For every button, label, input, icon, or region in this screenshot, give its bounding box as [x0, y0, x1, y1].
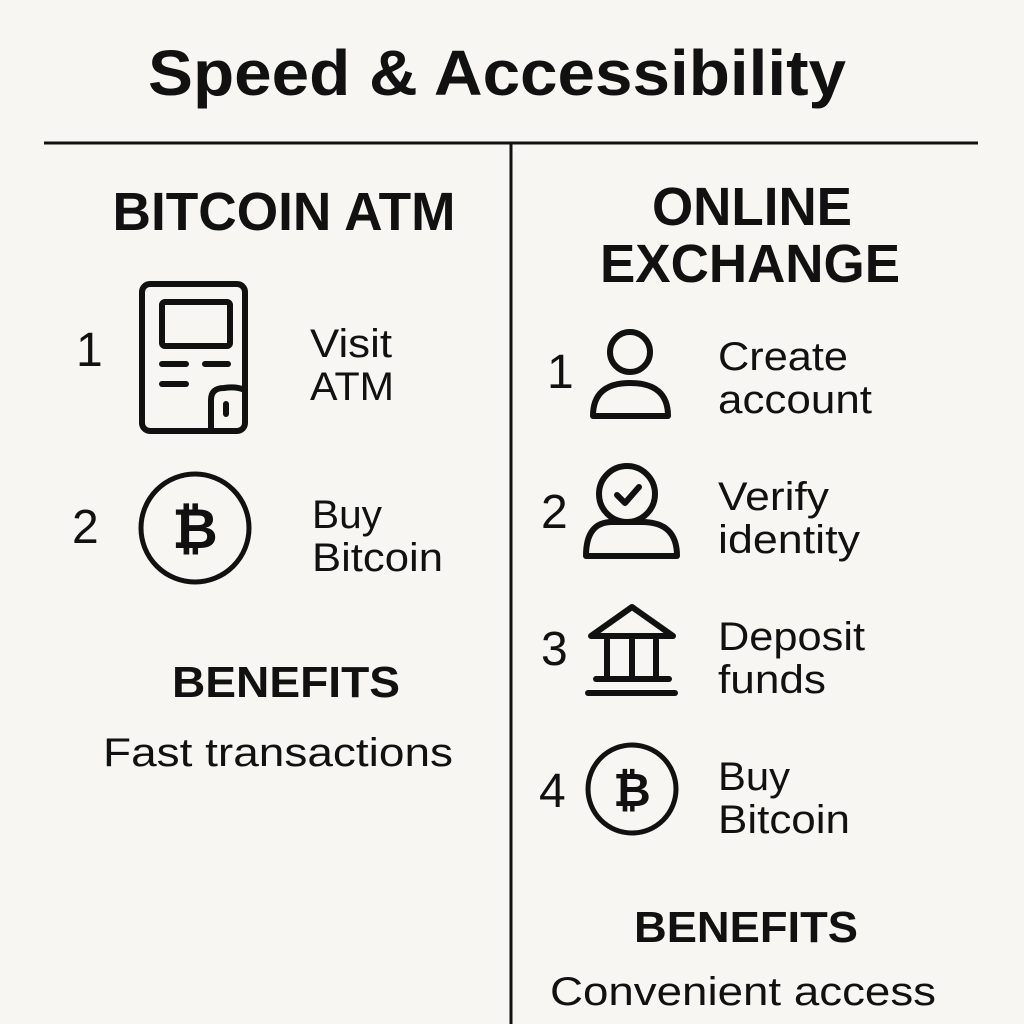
step 1: visit atm: ATM [310, 365, 394, 409]
panel: online exchange: EXCHANGE [600, 234, 900, 294]
icon: bank [588, 607, 675, 693]
icon: atm [142, 284, 245, 431]
panel: bitcoin atm [72, 182, 456, 775]
step 1: create account: 1 [547, 346, 574, 399]
step 2: verify identity [541, 466, 860, 562]
step 1: create account [547, 332, 872, 422]
step 1: create account: account [718, 378, 872, 422]
step 2: buy bitcoin: 2 [72, 501, 99, 554]
step 1: visit atm: 1 [76, 324, 103, 377]
step 1: visit atm: Visit [310, 322, 392, 366]
icon: bitcoin: ₿ [613, 764, 651, 816]
step 1: create account: Create [718, 335, 848, 379]
icon: bitcoin [141, 474, 249, 582]
benefit text: Fast transactions [103, 731, 453, 775]
step 4: buy bitcoin [539, 745, 850, 842]
step 4: buy bitcoin: 4 [539, 765, 566, 818]
step 2: verify identity: identity [718, 518, 860, 562]
icon: bitcoin [588, 745, 676, 833]
step 1: visit atm [76, 284, 394, 431]
benefits heading: BENEFITS [172, 658, 400, 707]
step 3: deposit funds: Deposit [718, 615, 865, 659]
step 2: verify identity: 2 [541, 486, 568, 539]
step 3: deposit funds [541, 607, 865, 702]
benefit text: Convenient access [550, 970, 936, 1014]
icon: bitcoin: ₿ [172, 497, 218, 560]
benefits heading: BENEFITS [634, 903, 858, 952]
title: Speed & Accessibility [148, 37, 846, 109]
panel: online exchange [539, 177, 936, 1014]
heading: online exchange: ONLINE [652, 177, 852, 237]
step 2: verify identity: Verify [718, 475, 829, 519]
icon: user [593, 332, 668, 416]
icon: verified user [586, 466, 677, 556]
step 2: buy bitcoin: Bitcoin [312, 536, 443, 580]
step 2: buy bitcoin [72, 474, 443, 582]
step 3: deposit funds: funds [718, 658, 826, 702]
step 4: buy bitcoin: Buy [718, 755, 790, 799]
step 2: buy bitcoin: Buy [312, 493, 382, 537]
step 3: deposit funds: 3 [541, 623, 568, 676]
heading: bitcoin atm: BITCOIN ATM [112, 182, 456, 242]
step 4: buy bitcoin: Bitcoin [718, 798, 850, 842]
